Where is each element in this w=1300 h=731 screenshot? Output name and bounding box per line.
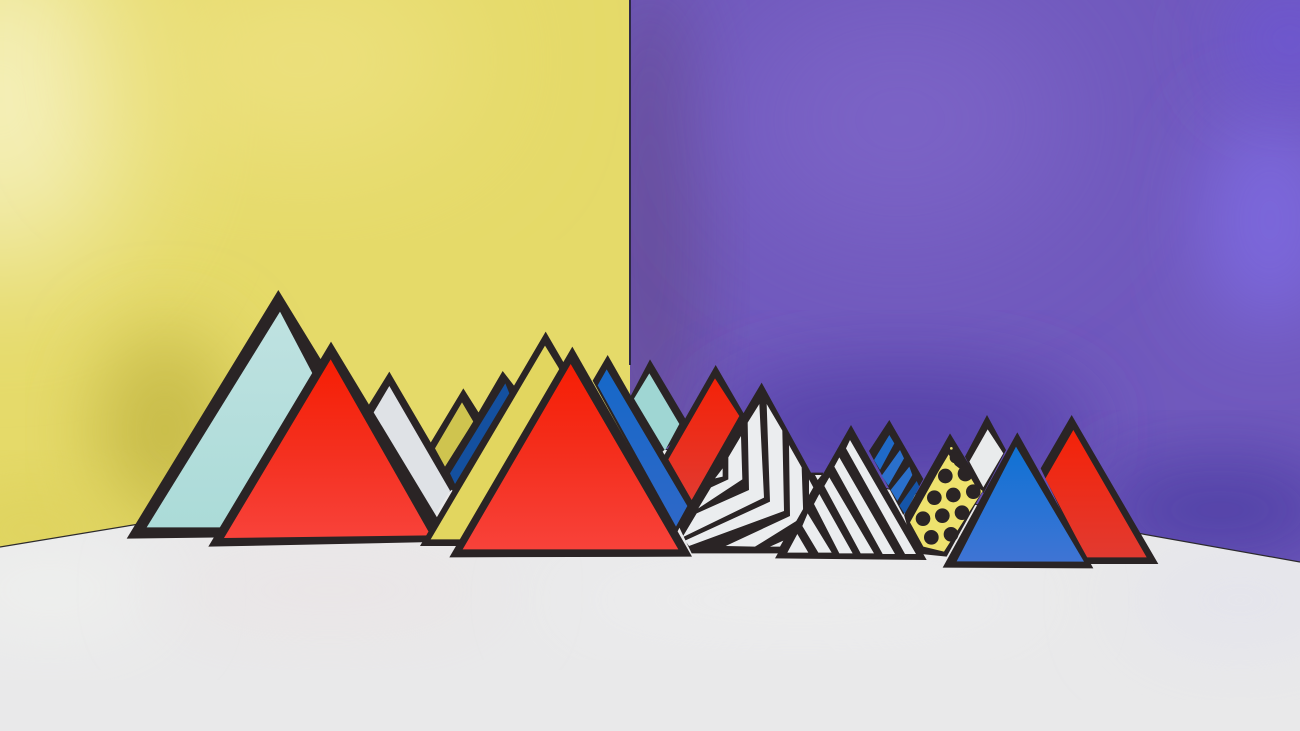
triangle: blue stripes, small [869, 420, 923, 515]
chevron bands [682, 404, 822, 547]
triangle: chevron stripes [678, 383, 823, 553]
diagonal white stripes [787, 440, 916, 554]
triangle: red, large left [208, 342, 452, 547]
black dots [916, 452, 981, 545]
triangle: pale teal, small [630, 359, 690, 460]
infographic scene [0, 0, 1300, 568]
triangle group: centre back [593, 355, 753, 533]
triangle: dark blue, narrow [445, 371, 520, 493]
yellow wall [0, 0, 630, 570]
triangle: yellow with black dots [904, 433, 984, 557]
triangle: red, large centre [449, 347, 692, 557]
blue stripes [874, 435, 919, 514]
triangle: white and black diagonal stripes [775, 425, 927, 560]
wall corner line [629, 0, 631, 365]
triangle: white, behind red [337, 372, 457, 533]
triangle: red, right [1041, 415, 1158, 564]
triangle: red, medium [664, 365, 753, 507]
triangle: blue, medium [593, 355, 692, 533]
triangle: small olive [431, 388, 483, 480]
triangle: blue, front [943, 432, 1093, 568]
triangle: yellow, large [420, 332, 653, 546]
purple wall [600, 0, 1300, 565]
triangle group: left cluster [127, 290, 520, 547]
floor [0, 443, 1300, 563]
triangle: pale teal, tall [127, 290, 415, 539]
triangle: white, small right [965, 415, 1006, 493]
